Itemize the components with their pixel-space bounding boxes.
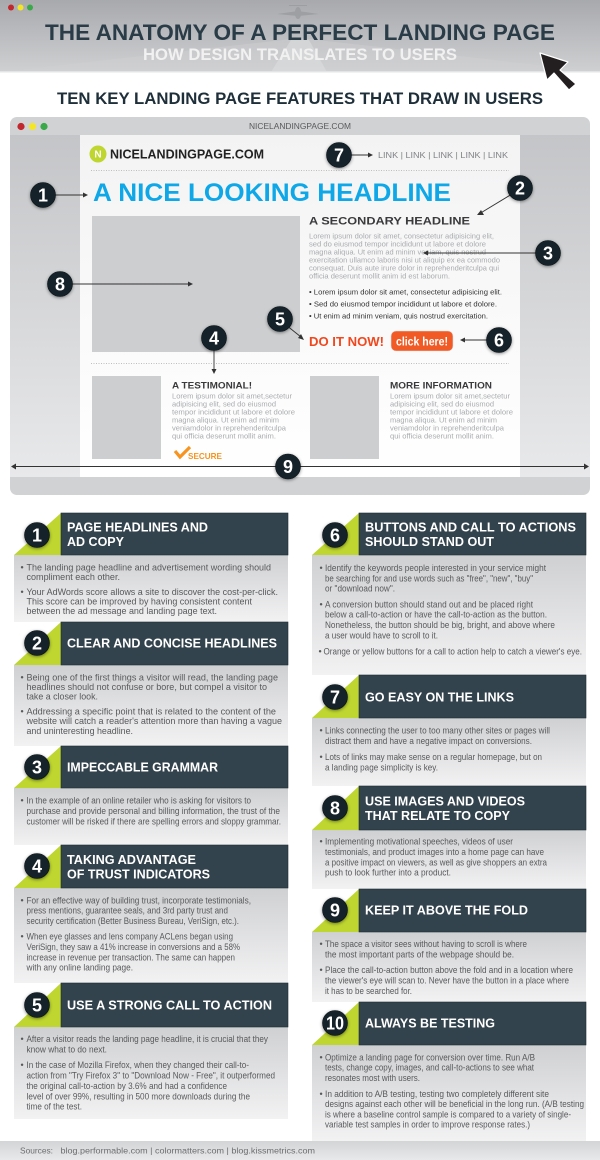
panel: feature 9: KEEP IT ABOVE THE FOLD <box>365 904 528 918</box>
lorem text: consequat. Duis aute irure dolor in reprehenderitculpa qui <box>309 264 499 272</box>
marker 1 with arrow <box>30 182 88 208</box>
bullet list: • Sed do eiusmod tempor incididunt ut labore et dolore. <box>309 300 497 308</box>
panel: feature 2: • <box>20 672 24 682</box>
testimonial: tempor incididunt ut labore et dolore <box>172 408 295 416</box>
subtitle: HOW DESIGN TRANSLATES TO USERS <box>143 46 457 64</box>
lorem text: sed do eiusmod tempor incididunt ut labore et dolore <box>309 240 486 248</box>
panel: feature 7: Links connecting the user to too many other sites or pages will <box>325 726 550 736</box>
panel: feature 1 <box>14 513 288 622</box>
panel: feature 4: 4 <box>32 856 42 876</box>
lorem text: magna aliqua. Ut enim ad minim veniam, quis nostrud <box>309 248 486 256</box>
panel: feature 2: and uninteresting headline. <box>26 726 133 736</box>
panel: feature 4: VeriSign, they saw a 41% increase in conversions and a 58% <box>26 942 240 952</box>
panel: feature 10 <box>312 1002 586 1141</box>
panel: feature 2: website will catch a reader's attention more than having a vague <box>25 716 282 726</box>
marker 4 with arrow <box>202 326 226 374</box>
panel: feature 6: A conversion button should stand out and be placed right <box>325 599 533 609</box>
panel: feature 4: • <box>20 895 24 905</box>
marker 5 with arrow: 5 <box>275 310 285 330</box>
logo: NICELANDINGPAGE.COM <box>110 148 264 162</box>
panel: feature 1: Your AdWords score allows a site to discover the cost-per-click. <box>26 587 278 597</box>
panel: feature 7: Lots of links may make sense on a regular homepage, but on <box>325 752 542 762</box>
icon: airplane <box>277 5 319 19</box>
logo: N <box>94 150 102 160</box>
more information: veniamdolor in reprehenderitculpa <box>390 424 505 432</box>
marker 8 with arrow: 8 <box>55 274 65 294</box>
marker 6 with arrow: 6 <box>494 330 504 350</box>
marker 6 with arrow <box>460 328 512 352</box>
panel: feature 2: take a closer look. <box>26 692 98 702</box>
panel: feature 10: Optimize a landing page for conversion over time. Run A/B <box>325 1052 535 1062</box>
panel: feature 8: testimonials, and product images into a home page can have <box>325 847 544 857</box>
lorem text: officia deserunt mollit anim id est laborum. <box>309 272 450 280</box>
marker 3 with arrow <box>423 240 560 266</box>
marker 4 with arrow: 4 <box>209 328 219 348</box>
panel: feature 4: with any online landing page. <box>26 962 133 972</box>
panel: feature 7: • <box>320 726 323 736</box>
panel: feature 1: • <box>20 562 24 572</box>
panel: feature 6: • <box>320 563 323 573</box>
panel: feature 1: The landing page headline and advertisement wording should <box>26 562 271 572</box>
testimonial: qui officia deserunt mollit anim. <box>172 432 276 440</box>
panel: feature 4: OF TRUST INDICATORS <box>67 868 210 882</box>
panel: feature 3: customer will be risked if there are spelling errors and sloppy grammar. <box>26 816 281 826</box>
panel: feature 9: • <box>320 965 323 975</box>
panel: feature 6: • <box>318 646 322 656</box>
panel: feature 5: time of the test. <box>26 1102 82 1112</box>
panel: feature 8: Implementing motivational speeches, videos of user <box>325 837 513 847</box>
marker 7 with arrow: 7 <box>334 146 344 166</box>
more information: MORE INFORMATION <box>390 380 492 392</box>
marker 7 with arrow <box>326 142 373 168</box>
button: click here! <box>396 334 448 348</box>
image placeholder <box>92 216 300 352</box>
panel: feature 9: the most important parts of the webpage should be. <box>325 949 514 959</box>
panel: feature 5: In the case of Mozilla Firefox, when they changed their call-to- <box>26 1060 249 1070</box>
panel: feature 10: 10 <box>326 1014 344 1034</box>
panel: feature 3: • <box>20 796 24 806</box>
panel: feature 10: resonates most with users. <box>325 1073 420 1083</box>
panel: feature 5: level of over 99%, resulting in 500 more downloads during the <box>26 1091 250 1101</box>
panel: feature 9: Place the call-to-action button above the fold and in a location where <box>325 965 573 975</box>
panel: feature 10: • <box>320 1089 323 1099</box>
icon: window dots <box>8 4 33 10</box>
testimonial <box>92 376 295 461</box>
more information: tempor incididunt ut labore et dolore <box>390 408 513 416</box>
panel: feature 6: SHOULD STAND OUT <box>365 535 494 549</box>
panel: feature 7: • <box>320 752 323 762</box>
panel: feature 1: compliment each other. <box>26 572 120 582</box>
panel: feature 8: push to look further into a product. <box>325 868 451 878</box>
panel: feature 3: purchase and provide personal and billing information, the trust of the <box>26 806 280 816</box>
testimonial: veniamdolor in reprehenderitculpa <box>172 424 287 432</box>
panel: feature 6: • <box>320 599 323 609</box>
panel: feature 4: press mentions, guarantee seals, and 3rd party trust and <box>26 906 228 916</box>
panel: feature 1: • <box>20 587 24 597</box>
panel: feature 10: variable test samples in order to improve response rates.) <box>325 1120 530 1130</box>
panel: feature 7: a landing page simplicity is key. <box>325 762 438 772</box>
title: THE ANATOMY OF A PERFECT LANDING PAGE <box>45 20 555 45</box>
panel: feature 4: TAKING ADVANTAGE <box>67 853 196 867</box>
panel: browser mockup <box>10 117 590 495</box>
browser url: NICELANDINGPAGE.COM <box>249 122 351 131</box>
section heading: TEN KEY LANDING PAGE FEATURES THAT DRAW IN USERS <box>57 90 543 108</box>
panel: feature 6: Nonetheless, the button should be big, bright, and above where <box>325 620 555 630</box>
panel: feature 6: be searching for and use words such as "free", "new", "buy" <box>325 573 533 583</box>
panel: feature 9: the viewer's eye will scan to. Never have the button in a place where <box>325 975 569 985</box>
icon: secure check: SECURE <box>188 451 222 461</box>
bullet list <box>309 288 502 320</box>
panel: feature 4: security certification (Better Business Bureau, VeriSign, etc.). <box>26 916 239 926</box>
panel: feature 7: 7 <box>330 688 340 708</box>
more information: qui officia deserunt mollit anim. <box>390 432 494 440</box>
panel: feature 6: 6 <box>330 526 340 546</box>
panel: feature 10: is where a baseline control sample is compared to a variety of single- <box>325 1109 571 1119</box>
panel: feature 4: increase in revenue per transaction. The same can happen <box>26 952 235 962</box>
panel: feature 9 <box>312 889 586 1002</box>
panel: feature 1: PAGE HEADLINES AND <box>67 520 208 534</box>
panel: feature 8: a positive impact on viewers, as well as give shoppers an extra <box>325 857 547 867</box>
panel: feature 8: THAT RELATE TO COPY <box>365 809 511 823</box>
panel: feature 4: For an effective way of building trust, incorporate testimonials, <box>26 895 251 905</box>
lorem text: Lorem ipsum dolor sit amet, consectetur adipisicing elit, <box>309 232 494 240</box>
panel: feature 3: In the example of an online retailer who is asking for visitors to <box>26 796 251 806</box>
panel: feature 6: a user would have to scroll to it. <box>325 631 438 641</box>
panel: feature 2: Addressing a specific point that is related to the content of the <box>26 707 276 717</box>
marker 8 with arrow <box>48 272 193 296</box>
panel: feature 9: • <box>320 939 323 949</box>
panel: feature 10: In addition to A/B testing, testing two completely different site <box>325 1089 549 1099</box>
panel: feature 5: USE A STRONG CALL TO ACTION <box>67 998 272 1012</box>
panel: feature 1: between the ad message and landing page text. <box>26 606 217 616</box>
more information <box>310 376 513 459</box>
panel: feature 7: GO EASY ON THE LINKS <box>365 690 514 704</box>
marker 1 with arrow: 1 <box>38 186 48 206</box>
testimonial: adipisicing elit, sed do eiusmod <box>172 400 276 408</box>
panel: feature 7 <box>312 675 586 786</box>
panel: feature 5: know what to do next. <box>26 1045 107 1055</box>
marker 2 with arrow <box>477 176 532 215</box>
panel: feature 2: CLEAR AND CONCISE HEADLINES <box>67 636 277 650</box>
panel: feature 3 <box>14 746 288 845</box>
testimonial: magna aliqua. Ut enim ad minim <box>172 416 279 424</box>
panel: feature 2: headlines should not confuse or bore, but compel a visitor to <box>26 682 267 692</box>
panel: feature 1: 1 <box>32 526 42 546</box>
testimonial: Lorem ipsum dolor sit amet,sectetur <box>172 392 293 400</box>
panel: feature 1: This score can be improved by having consistent content <box>26 596 252 606</box>
panel: feature 8: USE IMAGES AND VIDEOS <box>365 794 525 808</box>
panel: feature 5: action from "Try Firefox 3" to "Download Now - Free", it outperformed <box>26 1071 275 1081</box>
panel: feature 10: tests, change copy, images, and call-to-actions to see what <box>325 1063 534 1073</box>
panel: feature 5: 5 <box>32 996 42 1016</box>
secondary headline: A SECONDARY HEADLINE <box>309 216 470 228</box>
panel: feature 5: the original call-to-action by 3.6% and had a confidence <box>26 1081 227 1091</box>
more information: Lorem ipsum dolor sit amet,sectetur <box>390 392 511 400</box>
panel: feature 3: IMPECCABLE GRAMMAR <box>67 760 218 774</box>
panel: feature 4: • <box>20 932 24 942</box>
bullet list: • Lorem ipsum dolor sit amet, consectetur adipisicing elit. <box>309 288 502 296</box>
panel: feature 6 <box>312 513 586 675</box>
panel: feature 6: below a call-to-action or have the call-to-action as the button. <box>325 610 547 620</box>
panel: feature 7: distract them and have a negative impact on conversions. <box>325 736 532 746</box>
panel: feature 9: 9 <box>330 900 340 920</box>
panel: feature 4 <box>14 845 288 983</box>
panel: feature 4: When eye glasses and lens company ACLens began using <box>26 932 233 942</box>
more information: adipisicing elit, sed do eiusmod <box>390 400 494 408</box>
panel: feature 5: After a visitor reads the landing page headline, it is crucial that they <box>26 1034 268 1044</box>
panel: feature 9: it has to be searched for. <box>325 986 412 996</box>
icon: cursor arrow <box>540 53 576 90</box>
marker 3 with arrow: 3 <box>543 244 553 264</box>
bullet list: • Ut enim ad minim veniam, quis nostrud exercitation. <box>309 312 488 320</box>
header banner <box>0 0 600 72</box>
lorem text <box>309 232 500 280</box>
marker 5 with arrow <box>268 306 304 340</box>
marker 9 with double arrow: 9 <box>283 457 293 477</box>
panel: feature 9: The space a visitor sees without having to scroll is where <box>325 939 527 949</box>
panel: feature 8 <box>312 786 586 889</box>
panel: feature 5: • <box>20 1034 24 1044</box>
marker 2 with arrow: 2 <box>515 178 525 198</box>
panel: feature 8: 8 <box>330 798 340 818</box>
lorem text: exercitation ullamco laboris nisi ut aliquip ex ea commodo <box>309 256 500 264</box>
panel: feature 8: • <box>320 837 323 847</box>
footer sources: Sources: <box>20 1146 53 1156</box>
panel: feature 1: AD COPY <box>67 535 125 549</box>
panel: feature 6: Identify the keywords people interested in your service might <box>325 563 546 573</box>
panel: feature 3: 3 <box>32 758 42 778</box>
more information: magna aliqua. Ut enim ad minim <box>390 416 497 424</box>
panel: feature 6: BUTTONS AND CALL TO ACTIONS <box>365 520 576 534</box>
footer sources <box>0 1141 600 1160</box>
icon: secure check <box>175 447 222 461</box>
panel: feature 2: • <box>20 707 24 717</box>
panel: feature 2 <box>14 622 288 746</box>
mock headline: A NICE LOOKING HEADLINE <box>93 179 451 207</box>
panel: feature 2: Being one of the first things a visitor will read, the landing page <box>26 672 278 682</box>
panel: feature 10: • <box>320 1052 323 1062</box>
nav links: LINK | LINK | LINK | LINK | LINK <box>378 151 509 160</box>
marker 9 with double arrow <box>11 454 589 479</box>
button <box>391 331 453 351</box>
panel: feature 5 <box>14 983 288 1119</box>
panel: feature 10: ALWAYS BE TESTING <box>365 1016 495 1030</box>
call to action: DO IT NOW! <box>309 335 384 349</box>
panel: feature 5: • <box>20 1060 24 1070</box>
icon: browser dots <box>17 123 48 130</box>
testimonial: A TESTIMONIAL! <box>172 380 252 392</box>
footer sources: blog.performable.com | colormatters.com | blog.kissmetrics.com <box>60 1146 315 1156</box>
panel: feature 6: or "download now". <box>325 584 395 594</box>
panel: feature 2: 2 <box>32 634 42 654</box>
